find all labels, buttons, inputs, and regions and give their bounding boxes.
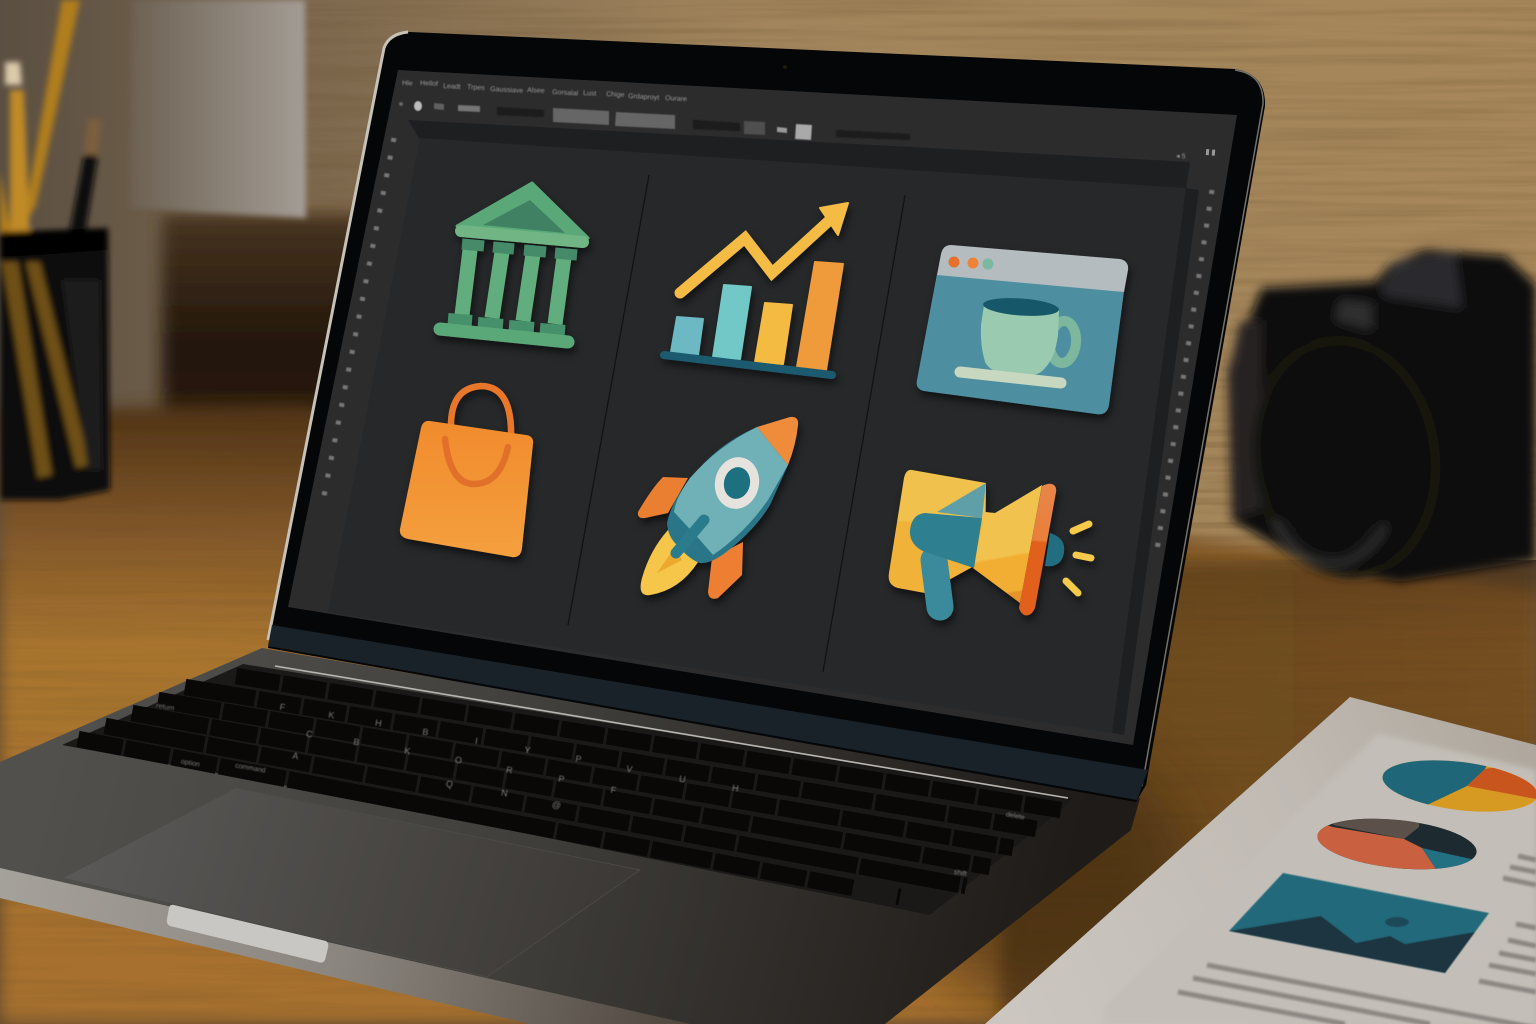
icon: bank	[440, 183, 588, 342]
laptop lid	[268, 32, 1265, 802]
side text lines	[1479, 856, 1536, 992]
left silver rim	[268, 32, 408, 640]
key labels: R	[505, 765, 514, 776]
saucer	[960, 372, 1061, 383]
pencil holder	[0, 0, 110, 500]
rocket body light	[674, 427, 788, 555]
pediment inner	[483, 200, 565, 233]
menu bar: Leadt	[443, 83, 461, 91]
key rows	[78, 676, 1061, 905]
key labels: A	[292, 751, 299, 761]
pie chart two	[1317, 818, 1477, 870]
icon: megaphone	[889, 470, 1091, 615]
laptop	[0, 32, 1265, 1024]
mouthpiece	[910, 513, 982, 568]
menu bar: Alsee	[527, 87, 545, 95]
camera body	[1228, 250, 1536, 582]
key labels: C	[305, 729, 314, 740]
trackpad	[62, 788, 640, 977]
nozzle	[676, 520, 704, 553]
key labels: I	[474, 736, 478, 746]
key labels: V	[626, 764, 633, 774]
menu bar: Chige	[606, 91, 625, 99]
key labels: return	[156, 702, 175, 713]
key labels	[156, 702, 1025, 878]
flame	[641, 530, 698, 595]
icon: rocket	[638, 417, 798, 599]
left tools	[322, 138, 394, 506]
laptop base deck	[0, 648, 1140, 1024]
plinth	[440, 329, 568, 342]
top-right tools	[1206, 152, 1218, 153]
keyboard hinge highlight	[275, 666, 1068, 798]
trend arrow	[680, 203, 848, 293]
cup handle	[1048, 320, 1078, 364]
key labels: shift	[953, 869, 967, 878]
key labels: B	[422, 727, 429, 737]
bottom text lines	[1178, 965, 1536, 1024]
columns	[462, 250, 564, 324]
camera	[1228, 250, 1536, 587]
menu bar	[402, 80, 1186, 161]
key labels: F	[279, 702, 286, 712]
key labels: F	[610, 785, 617, 795]
menu bar: Ourare	[665, 95, 687, 103]
dark recess under note	[162, 215, 402, 420]
nose cone	[757, 417, 798, 465]
bases	[448, 319, 565, 331]
front silver edge	[0, 868, 690, 1024]
key labels: Q	[445, 779, 454, 790]
webcam	[783, 65, 787, 69]
key labels: @	[551, 799, 562, 811]
handle	[934, 560, 940, 607]
menu bar: ◂ 5	[1176, 153, 1186, 161]
canvas divider two	[823, 195, 905, 672]
menu bar: Trpes	[467, 84, 485, 92]
entablature	[461, 231, 583, 242]
bars	[671, 262, 843, 370]
right rim	[1142, 70, 1263, 786]
desk	[0, 405, 1536, 1024]
chin	[268, 625, 1148, 800]
menu bar: Gaussiave	[490, 86, 523, 95]
right panel strip	[1112, 188, 1199, 735]
wall note paper	[130, 0, 306, 218]
capitals	[462, 244, 577, 255]
menu bar: Grdaproyt	[628, 93, 659, 102]
bag handle	[451, 386, 511, 440]
right tools	[1157, 190, 1212, 550]
menu bar: Lust	[583, 90, 597, 98]
teal triangle	[937, 483, 986, 518]
back square	[889, 470, 986, 593]
key labels: K	[404, 746, 411, 756]
pie chart one	[1382, 760, 1536, 812]
key labels: H	[731, 783, 739, 793]
mountains	[1229, 916, 1475, 973]
menu bar: Hellof	[420, 80, 438, 88]
key labels: Y	[524, 745, 531, 755]
icon: growth chart	[664, 203, 848, 375]
printed paper	[985, 697, 1536, 1024]
right fin	[708, 542, 743, 599]
window body	[917, 274, 1124, 414]
bag smile	[445, 439, 508, 484]
key labels: B	[353, 737, 360, 747]
latch notch	[167, 905, 328, 963]
paper sheet	[985, 697, 1536, 1024]
porthole	[710, 453, 764, 513]
horn	[973, 485, 1042, 603]
dark strip under toolbar	[408, 120, 1190, 190]
left fin	[638, 477, 688, 518]
canvas divider one	[568, 175, 649, 625]
key labels: P	[558, 774, 565, 784]
options bar	[399, 101, 910, 140]
horn rim	[1019, 484, 1056, 615]
key labels: option	[180, 758, 200, 769]
key labels: O	[454, 755, 463, 766]
dial	[1335, 300, 1372, 330]
cup mouth	[982, 296, 1060, 318]
pediment	[457, 183, 588, 238]
cup body	[981, 305, 1059, 375]
screen	[288, 65, 1237, 745]
icon: browser with cup	[917, 245, 1128, 414]
key labels: P	[575, 754, 582, 764]
menu bar: Gorsalal	[552, 89, 579, 97]
key labels: K	[328, 710, 335, 720]
key labels: U	[678, 774, 686, 784]
window dots	[948, 256, 994, 270]
lid outer frame	[268, 32, 1265, 802]
key labels: H	[374, 718, 382, 728]
background wall	[0, 0, 1536, 560]
lens	[1239, 329, 1451, 587]
key labels: delete	[1005, 811, 1025, 822]
keyboard well	[62, 664, 1072, 915]
picture placeholder	[1229, 873, 1489, 973]
key labels: N	[500, 788, 508, 798]
menu bar: Hle	[402, 80, 413, 88]
camera grip	[1230, 320, 1262, 518]
title bar	[937, 245, 1128, 292]
bag body	[400, 421, 533, 557]
icon: shopping bag	[400, 386, 533, 557]
viewfinder	[1380, 252, 1462, 308]
inner flame	[657, 547, 682, 573]
baseline	[664, 355, 832, 375]
sun	[1385, 917, 1409, 927]
rocket body dark	[667, 427, 788, 563]
sound rays	[1066, 524, 1091, 593]
speaker	[1045, 533, 1064, 566]
key labels: command	[235, 762, 266, 775]
canvas	[328, 138, 1186, 733]
inner panel	[1103, 734, 1536, 1024]
